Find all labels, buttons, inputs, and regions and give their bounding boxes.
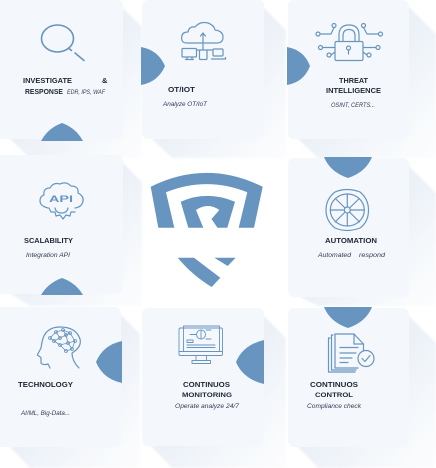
heading: MONITORING	[182, 392, 232, 399]
icon: head with neural network	[37, 327, 80, 368]
accent lens	[324, 157, 372, 178]
heading: investigate and response: RESPONSE	[25, 87, 63, 96]
icon: monitor with analysis	[179, 326, 222, 364]
panel: investigate and response	[0, 0, 123, 141]
logo: shield	[151, 173, 263, 287]
heading: investigate and response: INVESTIGATE	[23, 76, 72, 85]
icon: documents with check	[328, 334, 374, 372]
heading	[182, 380, 232, 399]
accent lens	[41, 278, 83, 295]
card background	[0, 0, 123, 139]
heading	[326, 76, 381, 95]
heading: OT/IOT	[168, 85, 195, 94]
panel: continuous control	[288, 307, 409, 447]
heading: CONTINUOS	[183, 380, 230, 389]
icon: API cloud and gear: API	[49, 194, 73, 205]
card background	[288, 158, 409, 297]
accent lens	[41, 123, 83, 141]
panel: technology	[0, 307, 122, 447]
card background	[288, 308, 409, 447]
card background	[288, 0, 409, 139]
heading	[310, 380, 358, 399]
accent lens	[324, 307, 372, 328]
heading: investigate and response: &	[102, 76, 108, 85]
heading: SCALABILITY	[24, 236, 73, 245]
description: AI/ML, Big-Data...	[20, 410, 70, 417]
description: Integration API	[26, 252, 70, 259]
description: Compliance check	[307, 403, 362, 410]
icon: magnifying glass	[42, 25, 84, 60]
panel: automation	[288, 157, 409, 297]
card background	[0, 307, 121, 447]
description: respond	[359, 252, 385, 259]
card background	[142, 0, 264, 139]
card background	[0, 155, 123, 294]
accent lens	[236, 340, 264, 384]
heading: AUTOMATION	[325, 236, 377, 245]
description: Automated	[317, 252, 351, 259]
heading: CONTROL	[315, 392, 353, 399]
icon: cloud and devices	[182, 22, 226, 60]
heading: TECHNOLOGY	[18, 380, 73, 389]
card background	[142, 308, 264, 446]
accent lens	[287, 47, 310, 85]
panel: threat intelligence	[287, 0, 409, 139]
heading: CONTINUOS	[310, 380, 358, 389]
icon: padlock with circuit	[316, 24, 382, 60]
panel: continuous monitoring	[142, 308, 264, 446]
heading: INTELLIGENCE	[326, 86, 381, 95]
panel: OT/IoT	[141, 0, 264, 139]
icon: wheel	[326, 190, 368, 230]
description	[317, 252, 385, 259]
accent lens	[96, 341, 122, 383]
panel: scalability	[0, 155, 123, 295]
heading: investigate and response	[23, 76, 108, 96]
description: Operate analyze 24/7	[175, 403, 239, 410]
description: EDR, IPS, WAF	[67, 89, 106, 96]
heading: THREAT	[339, 76, 368, 85]
description: OSINT, CERTS...	[331, 102, 375, 109]
accent lens	[141, 47, 165, 85]
description: Analyze OT/IoT	[162, 101, 208, 108]
